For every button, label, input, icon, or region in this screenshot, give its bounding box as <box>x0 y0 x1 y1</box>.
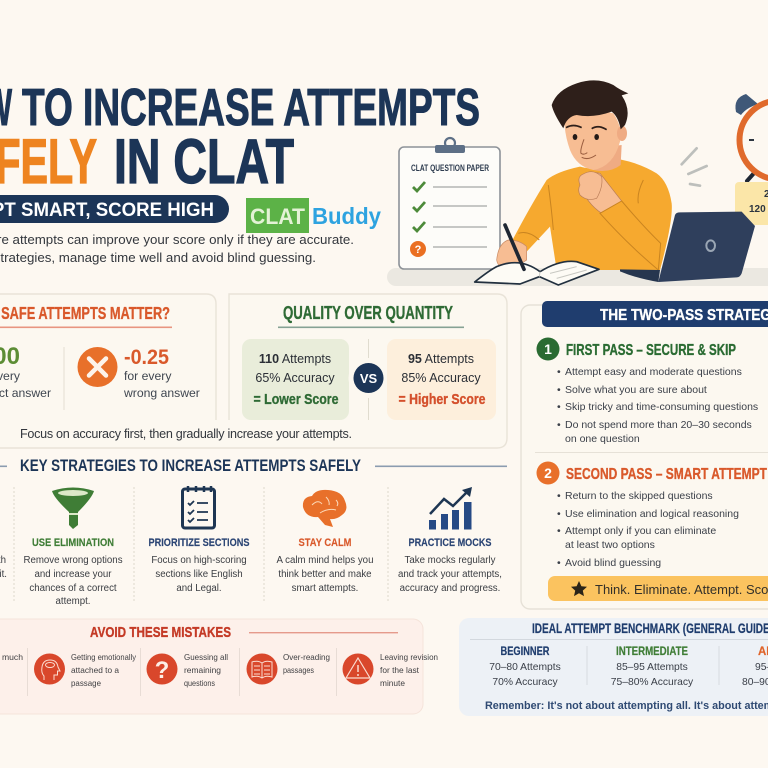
mistake: over-reading <box>246 652 330 684</box>
second pass: • <box>557 508 561 520</box>
header: two-pass strategy <box>542 301 768 327</box>
mistake: leaving revision: minute <box>380 678 405 688</box>
strategy: practice mocks <box>398 487 502 594</box>
clipboard: CLAT QUESTION PAPER <box>411 163 489 173</box>
stat: minus quarter: -0.25 <box>124 346 169 369</box>
strategy: prioritize sections: sections like English <box>155 569 243 580</box>
strategy: stay calm: think better and make <box>278 569 372 580</box>
heading: key strategies: KEY STRATEGIES TO INCREASE ATTEMPTS SAFELY <box>20 457 361 475</box>
heading: quality over quantity: QUALITY OVER QUANTITY <box>283 303 453 323</box>
strategy: use elimination: and increase your <box>34 569 112 580</box>
first pass: Do not spend more than 20–30 seconds <box>565 419 752 431</box>
first pass: • <box>557 366 561 378</box>
title <box>0 79 480 197</box>
strategy: practice mocks: PRACTICE MOCKS <box>408 537 492 549</box>
icon: checklist <box>182 486 214 528</box>
strategy: practice mocks: Take mocks regularly <box>404 555 496 566</box>
panel: ideal attempt benchmark <box>459 618 768 716</box>
strategy: use elimination: chances of a correct <box>29 583 117 594</box>
second pass: • <box>557 490 561 502</box>
heading: avoid these mistakes: AVOID THESE MISTAKES <box>90 624 231 641</box>
first pass: Solve what you are sure about <box>565 384 707 396</box>
level: intermediate: INTERMEDIATE <box>616 646 688 658</box>
mistake: leaving revision: Leaving revision <box>380 652 438 662</box>
title: IN CLAT <box>114 127 294 197</box>
comparison: 110 attempts: = Lower Score <box>254 391 338 408</box>
mistake: emotional attachment: attached to a <box>71 665 119 675</box>
strategy: use elimination: USE ELIMINATION <box>32 537 114 549</box>
strategy: prioritize sections: PRIORITIZE SECTIONS <box>148 537 250 549</box>
icon: funnel <box>52 488 94 529</box>
comparison: 95 attempts: = Higher Score <box>398 391 486 408</box>
callout: think eliminate attempt score <box>548 576 768 601</box>
second pass: Use elimination and logical reasoning <box>565 508 739 520</box>
first pass: Attempt easy and moderate questions <box>565 366 742 378</box>
icon: rising chart <box>429 487 472 530</box>
icon: brain <box>303 490 346 527</box>
logo: CLATBuddy <box>246 198 381 233</box>
strategy: stay calm: smart attempts. <box>292 583 358 594</box>
second pass: Attempt only if you can eliminate <box>565 525 716 537</box>
comparison: 95 attempts: 85% Accuracy <box>401 371 481 385</box>
strategy: prioritize sections: Focus on high-scoring <box>151 555 247 566</box>
second pass: • <box>557 557 561 569</box>
clipboard <box>399 138 500 269</box>
mistake: over-reading: passages <box>283 665 314 675</box>
strategy: stay calm: A calm mind helps you <box>277 555 373 566</box>
panel: two-pass strategy <box>521 301 768 609</box>
mistake: leaving revision: for the last <box>380 665 420 675</box>
comparison: 95 attempts <box>387 339 496 420</box>
stat: plus one <box>0 343 51 400</box>
icon: wrong cross <box>78 347 118 387</box>
strategy: use elimination <box>23 488 123 607</box>
mistake: leaving revision <box>342 652 438 688</box>
illustration: student at desk <box>387 80 768 286</box>
partial strategy text <box>0 555 7 580</box>
stat: minus quarter <box>123 346 200 400</box>
level: advanced <box>742 646 768 688</box>
first pass: • <box>557 419 561 431</box>
strategy: use elimination: Remove wrong options <box>23 555 123 566</box>
mistake: emotional attachment: passage <box>71 678 101 688</box>
second pass: 2 <box>544 465 552 481</box>
second pass: Return to the skipped questions <box>565 490 713 502</box>
panel: why safe attempts matter and quality over quantity <box>0 294 507 448</box>
mistake: guessing: remaining <box>184 665 221 675</box>
second pass: • <box>557 525 561 537</box>
comparison: 95 attempts: 95 Attempts <box>408 352 474 366</box>
comparison: 110 attempts <box>242 339 349 420</box>
mistake: emotional attachment <box>34 652 137 688</box>
comparison: 110 attempts: 65% Accuracy <box>255 371 335 385</box>
mistake: guessing: questions <box>184 678 215 688</box>
panel: avoid these mistakes <box>0 619 438 714</box>
first pass: • <box>557 401 561 413</box>
mistake: over-reading: Over-reading <box>283 652 330 662</box>
desk surface <box>387 268 768 286</box>
level: intermediate: 85–95 Attempts <box>616 662 688 673</box>
second pass: at least two options <box>565 539 655 551</box>
badge: VS <box>348 358 388 398</box>
level: beginner: 70–80 Attempts <box>489 662 561 673</box>
strategy: prioritize sections: and Legal. <box>176 583 222 594</box>
strategy: practice mocks: and track your attempts, <box>398 569 502 580</box>
title: TO INCREASE ATTEMPTS <box>22 79 480 137</box>
strategy: use elimination: attempt. <box>56 596 90 607</box>
strategy: stay calm: STAY CALM <box>298 537 352 549</box>
student figure, drawn in 3x crop coordinates <box>475 80 755 285</box>
strategy: stay calm <box>277 490 373 594</box>
mistake: guessing: Guessing all <box>184 652 228 662</box>
level: intermediate: 75–80% Accuracy <box>611 677 694 688</box>
logo: CLATBuddy: Buddy <box>312 203 381 229</box>
intro text <box>0 232 354 265</box>
note: focus on accuracy: Focus on accuracy first, then gradually increase your attempts. <box>20 427 352 441</box>
first pass: • <box>557 384 561 396</box>
strategy: practice mocks: accuracy and progress. <box>400 583 500 594</box>
level: beginner: 70% Accuracy <box>492 677 558 688</box>
level: intermediate <box>611 646 694 688</box>
stat: minus quarter: for every <box>124 369 172 383</box>
section: key strategies <box>0 457 507 607</box>
level: beginner: BEGINNER <box>500 646 550 658</box>
logo: CLATBuddy: CLAT <box>250 204 306 229</box>
second pass <box>536 462 767 569</box>
first pass <box>536 338 758 445</box>
second pass: Avoid blind guessing <box>565 557 661 569</box>
first pass: 1 <box>544 341 552 357</box>
clipboard: ? <box>415 244 422 256</box>
mistake: emotional attachment: Getting emotionally <box>71 652 137 662</box>
alarm clock and duration note <box>735 94 768 225</box>
first pass: on one question <box>565 433 640 445</box>
first pass: Skip tricky and time-consuming questions <box>565 401 758 413</box>
strategy: prioritize sections <box>148 486 250 594</box>
mistake: guessing: ? <box>155 657 169 684</box>
mistake: guessing <box>146 652 228 688</box>
stat: minus quarter: wrong answer <box>123 386 200 400</box>
level: beginner <box>489 646 561 688</box>
comparison: 110 attempts: 110 Attempts <box>259 352 331 366</box>
badge: VS: VS <box>360 371 377 386</box>
